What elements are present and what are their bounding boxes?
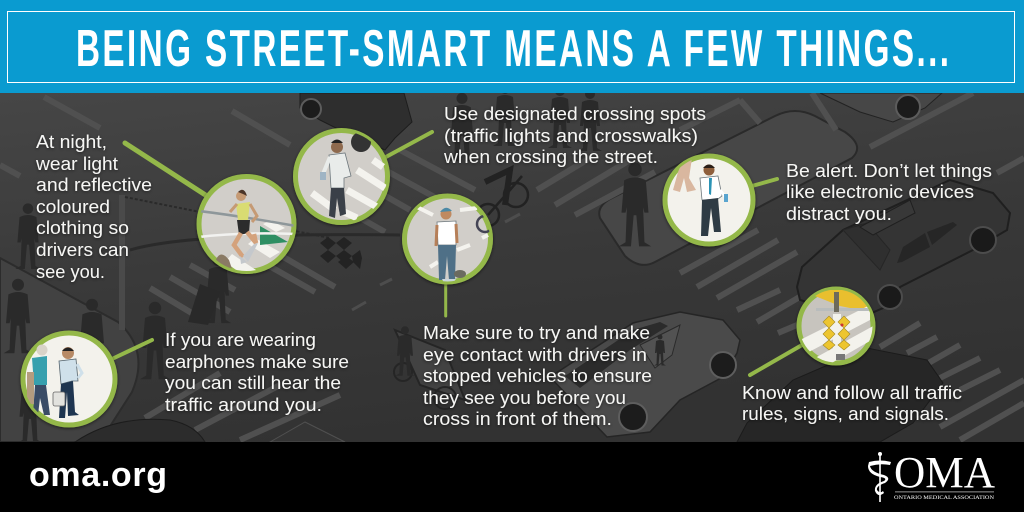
traffic signal pole and mast [122, 195, 400, 330]
pedestrian silhouettes [4, 84, 666, 443]
man figure [700, 164, 728, 236]
logo subtitle: ONTARIO MEDICAL ASSOCIATION [894, 496, 994, 501]
text: be alert [786, 161, 992, 224]
callout: man looking at phone [665, 156, 753, 244]
text: traffic rules: Know and follow all traffic [742, 383, 962, 403]
line: earphones [112, 340, 152, 359]
text: crossing spots: Use designated crossing spots [444, 104, 706, 124]
text: crossing spots [443, 104, 706, 167]
car: top left van [300, 93, 412, 150]
cargo tricycle [394, 330, 465, 409]
callout: runner at night [199, 176, 296, 280]
text: earphones: If you are wearing [165, 330, 316, 350]
man in corner [216, 254, 232, 268]
line: crossing spots [384, 132, 432, 158]
text: eye contact: eye contact with drivers in [423, 345, 647, 365]
text: night clothing: clothing so [36, 218, 129, 238]
text: earphones: traffic around you. [165, 395, 322, 415]
cyclist [477, 170, 528, 226]
wheel: top right car [896, 95, 920, 119]
text: crossing spots: when crossing the street. [443, 147, 658, 167]
car: lower right dark [737, 348, 943, 442]
taxi [797, 180, 1010, 318]
text: eye contact: Make sure to try and make [423, 323, 650, 343]
line: be alert [752, 179, 777, 186]
legs of second person [673, 158, 696, 192]
man figure [436, 208, 466, 283]
man in blue figure [27, 344, 50, 415]
footer url: oma.org [29, 456, 167, 494]
title: BEING STREET-SMART MEANS A FEW THINGS... [76, 20, 949, 78]
text: be alert: Be alert. Don’t let things [786, 161, 992, 181]
text: night clothing: At night, [36, 132, 107, 152]
header frame [8, 12, 1014, 82]
text: earphones: you can still hear the [165, 373, 341, 393]
text: eye contact: they see you before you [423, 388, 626, 408]
text: traffic rules [742, 383, 962, 424]
icon: caduceus [868, 452, 891, 502]
car: top right [820, 93, 942, 122]
luggage dolly [188, 284, 220, 325]
text: be alert: like electronic devices [786, 182, 974, 202]
wheel: top left van [301, 99, 321, 119]
text: be alert: distract you. [786, 204, 892, 224]
signal heads [823, 316, 850, 350]
connector lines [112, 132, 802, 375]
header band [0, 0, 1024, 93]
walking man figure [320, 140, 351, 218]
text: night clothing: and reflective [36, 175, 152, 195]
runner figure [230, 190, 258, 264]
text: eye contact [423, 323, 652, 429]
text: eye contact: stopped vehicles to ensure [423, 366, 652, 386]
text: earphones [165, 330, 349, 415]
footer band [0, 442, 1024, 512]
text: eye contact: cross in front of them. [423, 409, 612, 429]
callout: walking on crosswalk [296, 130, 388, 222]
text: night clothing: see you. [36, 262, 105, 282]
line: traffic rules [750, 345, 802, 375]
line: eye contact [444, 282, 447, 316]
car: lower left roof [75, 419, 205, 442]
text: traffic rules: rules, signs, and signals. [742, 404, 949, 424]
car: centre silver [550, 312, 740, 437]
logo wordmark: OMA [894, 448, 995, 497]
text: night clothing [35, 132, 152, 282]
sidewalk: lower left corner [0, 258, 138, 442]
text: night clothing: drivers can [36, 240, 129, 260]
text: earphones: earphones make sure [165, 352, 349, 372]
road markings [0, 93, 1024, 440]
sidewalk: top centre island [599, 111, 857, 265]
street scene background [0, 84, 1024, 443]
text: night clothing: wear light [35, 154, 118, 174]
callout: man with earphones and bag [23, 333, 115, 425]
man with phone figure [53, 347, 82, 418]
road centre dashes [352, 214, 520, 310]
callout: standing man with cap [404, 196, 493, 283]
text: crossing spots: (traffic lights and crosswalks) [444, 126, 698, 146]
building roof: lower centre left [270, 422, 345, 442]
text: night clothing: coloured [36, 197, 110, 217]
traffic signal housing [320, 237, 362, 269]
callout: traffic lights [799, 289, 876, 364]
line: night clothing [125, 143, 207, 196]
OMA logo [868, 448, 995, 502]
